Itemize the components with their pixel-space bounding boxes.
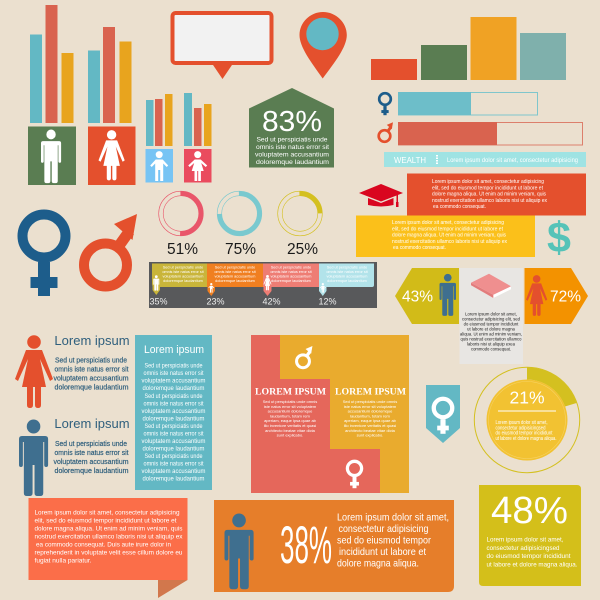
panel: 38% orange box: 38% (280, 516, 332, 575)
panel: 48% card: consectetur adipisicingsed (486, 545, 560, 552)
panel: teal text column: voluptatem accusantium (142, 409, 206, 415)
donut: 75%: 75% (225, 241, 256, 258)
panel: grey book card: quis nostrud exercitation ullamco (461, 336, 522, 342)
circle chart: 21%: ut labore et dolore magna aliqua. (496, 436, 556, 442)
panel: dark percentage strip: Sed ut perspiciatis unde (163, 266, 203, 270)
icon: small female symbol (379, 93, 391, 115)
panel: dark percentage strip: omnis iste natus error sit (162, 270, 205, 274)
circle chart: 21%: consectetur adipisicingsed (496, 425, 546, 431)
panel: dark percentage strip: omnis iste natus error sit (270, 270, 313, 274)
panel: dark percentage strip: Sed ut perspiciatis unde (327, 266, 367, 270)
donut: 75% (217, 191, 262, 258)
panel: teal text column: omnis iste natus error sit (144, 371, 204, 377)
panel: dark percentage strip: 12% (318, 296, 337, 306)
panel: coral folded note: elit, sed do eiusmod tempor incididunt ut labore et (34, 518, 177, 524)
panel: 48% card: 48% (491, 490, 568, 532)
speech bubble (172, 13, 272, 79)
panel: 83% house: doloremque laudantium (256, 159, 329, 166)
panel: 48% card (479, 485, 581, 586)
panel: teal text column: Lorem ipsum (144, 344, 204, 356)
panel: 38% orange box: dolore magna aliqua. (337, 558, 419, 570)
panel: stepped two-colour block: architecto beatae vitae dicta (345, 428, 396, 433)
panel: 38% orange box (214, 500, 454, 592)
panel: stepped two-colour block: LOREM IPSUM (335, 388, 406, 398)
progress bar: male (398, 122, 582, 145)
text block: woman caption: Sed ut perspiciatis unde (55, 356, 127, 364)
panel: dark percentage strip: 23% (206, 296, 225, 306)
panel: 38% orange box: consectetur adipisicing (338, 523, 429, 535)
panel: dark percentage strip: doloremque laudantium (327, 279, 367, 283)
panel: stepped two-colour block: sunt explicabo. (277, 433, 303, 438)
panel: teal text column: Sed ut perspiciatis unde (144, 394, 203, 400)
panel: stepped two-colour block (251, 335, 409, 493)
icon: large female symbol (22, 214, 66, 296)
panel: 83% house: Sed ut perspiciatis unde (256, 136, 328, 144)
circle chart: 21%: do eiusmod tempor incididunt (496, 431, 553, 437)
panel: grey book card: Lorem ipsum dolor sit amet, (465, 312, 517, 316)
bar chart: four colour columns (371, 17, 566, 80)
panel: teal text column: Sed ut perspiciatis unde (144, 424, 203, 430)
panel: teal text column: omnis iste natus error sit (144, 462, 204, 468)
text block: man caption: Sed ut perspiciatis unde (55, 439, 127, 448)
donut: 25% (278, 191, 322, 258)
panel: coral folded note: Lorem ipsum dolor sit amet, consectetur adipisicing (34, 510, 180, 516)
text box: red (407, 174, 586, 216)
panel: grey book card: consectetur adipisicing elit, sed (462, 316, 521, 322)
text box: red: dolore magna aliqua. Ut enim ad minim veniam, quis (432, 192, 546, 198)
panel: dark percentage strip: Sed ut perspiciatis unde (271, 266, 311, 270)
panel: dark percentage strip: voluptatem accusantium (215, 274, 255, 278)
text box: red: elit, sed do eiusmod tempor incididunt ut labore et (432, 185, 543, 191)
text box: yellow (356, 216, 535, 257)
panel: 48% card: do eiusmod tempor incididunt (486, 553, 571, 560)
panel: stepped two-colour block: Sed ut perspiciatis unde omnis (343, 399, 397, 404)
icon: dollar sign: $ (547, 214, 571, 262)
panel: stepped two-colour block: illo inventore veritatis et quasi (344, 423, 396, 428)
panel: coral folded note: fugiat nulla pariatur. (34, 558, 92, 564)
panel: teal text column (135, 335, 212, 490)
panel: dark percentage strip: 42% (262, 296, 281, 306)
banner: wealth: Lorem ipsum dolor sit amet, consectetur adipisicing (447, 158, 578, 164)
banner: wealth (384, 152, 586, 167)
text box: yellow: elit, sed do eiusmod tempor incididunt ut labore et (392, 226, 503, 232)
text box: yellow: Lorem ipsum dolor sit amet, consectetur adipisicing (392, 220, 504, 226)
panel: 72% hexagon: 72% (550, 288, 581, 306)
panel: 72% hexagon (524, 268, 588, 324)
panel: 43% hexagon (395, 268, 459, 324)
text box: yellow: ea commodo consequat. (393, 245, 446, 251)
ribbon: female badge (426, 385, 460, 443)
panel: stepped two-colour block: LOREM IPSUM (255, 388, 326, 398)
panel: teal text column: doloremque laudantium (142, 476, 204, 482)
donut: 51% (159, 191, 203, 258)
donut: 51%: 51% (167, 241, 198, 258)
panel: dark percentage strip: voluptatem accusantium (327, 274, 367, 278)
panel: dark percentage strip: doloremque laudantium (215, 279, 255, 283)
icon: small male symbol (379, 122, 393, 142)
text block: man caption: doloremque laudantium (54, 466, 128, 475)
panel: 48% card: ut labore et dolore magna aliqua. (486, 561, 578, 568)
panel: dark percentage strip: voluptatem accusantium (271, 274, 311, 278)
panel: grey book card: ut labore et dolore magna (467, 326, 516, 332)
circle chart: 21%: Lorem ipsum dolor sit amet, (496, 420, 548, 426)
panel: dark percentage strip: omnis iste natus error sit (214, 270, 257, 274)
panel: stepped two-colour block: aperiam, eaque ipsa quae ab (264, 418, 317, 423)
panel: girl bar chart (184, 93, 212, 182)
panel: teal text column: doloremque laudantium (142, 416, 204, 422)
text block: man caption: voluptatem accusantium (54, 457, 128, 466)
panel: boy bar chart (146, 94, 173, 182)
panel: male bar chart (28, 5, 76, 185)
text box: red: nostrud exercitation ullamco laboris nisi ut aliquip ex (432, 198, 547, 204)
text block: woman caption: doloremque laudantium (54, 382, 128, 392)
panel: teal text column: voluptatem accusantium (142, 439, 206, 445)
icon: large male symbol (84, 214, 137, 286)
panel: teal text column: Sed ut perspiciatis unde (144, 454, 203, 460)
text box: red: Lorem ipsum dolor sit amet, consectetur adipisicing (432, 179, 544, 185)
panel: grey book card: laboris nisi ut aliquip exea (467, 342, 516, 346)
panel: stepped two-colour block: laudantium, totam rem (270, 413, 311, 418)
panel: dark percentage strip: doloremque laudantium (271, 279, 311, 283)
panel: teal text column: omnis iste natus error sit (144, 402, 204, 408)
panel: stepped two-colour block: accusantium doloremque (268, 409, 313, 414)
text block: woman caption: Lorem ipsum (54, 333, 130, 348)
icon: map pin (300, 12, 347, 78)
panel: stepped two-colour block: sunt explicabo. (357, 433, 383, 438)
icon: blue man figure (19, 420, 48, 496)
panel: dark percentage strip: voluptatem accusantium (163, 274, 203, 278)
text block: man caption: omnis iste natus error sit (54, 448, 129, 457)
panel: stepped two-colour block: accusantium doloremque (348, 409, 393, 414)
text box: yellow: dolore magna aliqua. Ut enim ad minim veniam, quis (392, 233, 506, 239)
text block: woman caption (54, 333, 130, 392)
text block: man caption (54, 416, 130, 475)
circle chart: 21%: 21% (509, 388, 545, 408)
panel: teal text column: doloremque laudantium (142, 446, 204, 452)
text block: man caption: Lorem ipsum (54, 416, 130, 431)
panel: 38% orange box: sed do eiusmod tempor (337, 534, 431, 546)
panel: 43% hexagon: 43% (402, 288, 433, 306)
panel: stepped two-colour block: laudantium, totam rem (350, 413, 391, 418)
panel: stepped two-colour block: Sed ut perspiciatis unde omnis (263, 399, 317, 404)
panel: dark percentage strip: omnis iste natus error sit (326, 270, 369, 274)
text box: yellow: nostrud exercitation ullamco laboris nisi ut aliquip ex (392, 239, 507, 245)
icon: graduation cap (359, 184, 403, 207)
panel: dark percentage strip: 35% (150, 296, 168, 306)
panel: stepped two-colour block: aperiam, eaque ipsa quae ab (344, 418, 397, 423)
panel: grey book card: commodo consequat. (471, 346, 511, 352)
panel: teal text column: voluptatem accusantium (142, 469, 206, 475)
panel: coral folded note: reprehenderit in voluptate velit esse cillum dolore eu (34, 550, 183, 556)
panel: dark percentage strip: Sed ut perspiciatis unde (215, 266, 255, 270)
panel: stepped two-colour block: iste natus error sit voluptatem (264, 404, 317, 409)
panel: stepped two-colour block: architecto beatae vitae dicta (265, 428, 316, 433)
panel: grey book card: aliqua. Ut enim ad minim veniam, (460, 332, 522, 336)
circle chart: 21% (474, 367, 580, 473)
panel: teal text column: Sed ut perspiciatis unde (144, 364, 203, 370)
panel: teal text column: doloremque laudantium (142, 386, 204, 392)
panel: 38% orange box: incididunt ut labore et (339, 546, 426, 558)
panel: coral folded note: dolore magna aliqua. Ut enim ad minim veniam, quis (34, 526, 183, 532)
donut: 25%: 25% (287, 241, 318, 258)
panel: female bar chart (88, 27, 136, 185)
icon: red woman figure (15, 335, 53, 408)
panel: stepped two-colour block: illo inventore veritatis et quasi (264, 423, 316, 428)
text box: red: ea commodo consequat. (433, 204, 486, 210)
panel: 48% card: Lorem ipsum dolor sit amet, (486, 536, 564, 544)
panel: 83% house (249, 88, 334, 168)
panel: dark percentage strip: doloremque laudantium (163, 279, 203, 283)
panel: grey book card (460, 268, 523, 364)
banner: wealth: WEALTH (394, 155, 426, 165)
panel: stepped two-colour block: iste natus error sit voluptatem (344, 404, 397, 409)
panel: 83% house: omnis iste natus error sit (256, 144, 329, 151)
panel: 83% house: 83% (262, 106, 322, 138)
panel: coral folded note (28, 498, 188, 598)
panel: teal text column: omnis iste natus error sit (144, 432, 204, 438)
text block: woman caption: voluptatem accusantium (54, 374, 128, 382)
panel: coral folded note: ea commodo consequat. Duis aute irure dolor in (36, 542, 171, 548)
progress bar: female (398, 92, 538, 115)
panel: 83% house: voluptatem accusantium (255, 152, 329, 158)
panel: coral folded note: nostrud exercitation ullamco laboris nisi ut aliquip ex (34, 534, 183, 540)
panel: dark percentage strip (149, 262, 377, 308)
panel: 38% orange box: Lorem ipsum dolor sit amet, (337, 512, 449, 524)
text block: woman caption: omnis iste natus error sit (54, 364, 129, 374)
panel: grey book card: do eiusmod tempor incididunt (464, 322, 519, 326)
panel: teal text column: voluptatem accusantium (142, 378, 206, 384)
